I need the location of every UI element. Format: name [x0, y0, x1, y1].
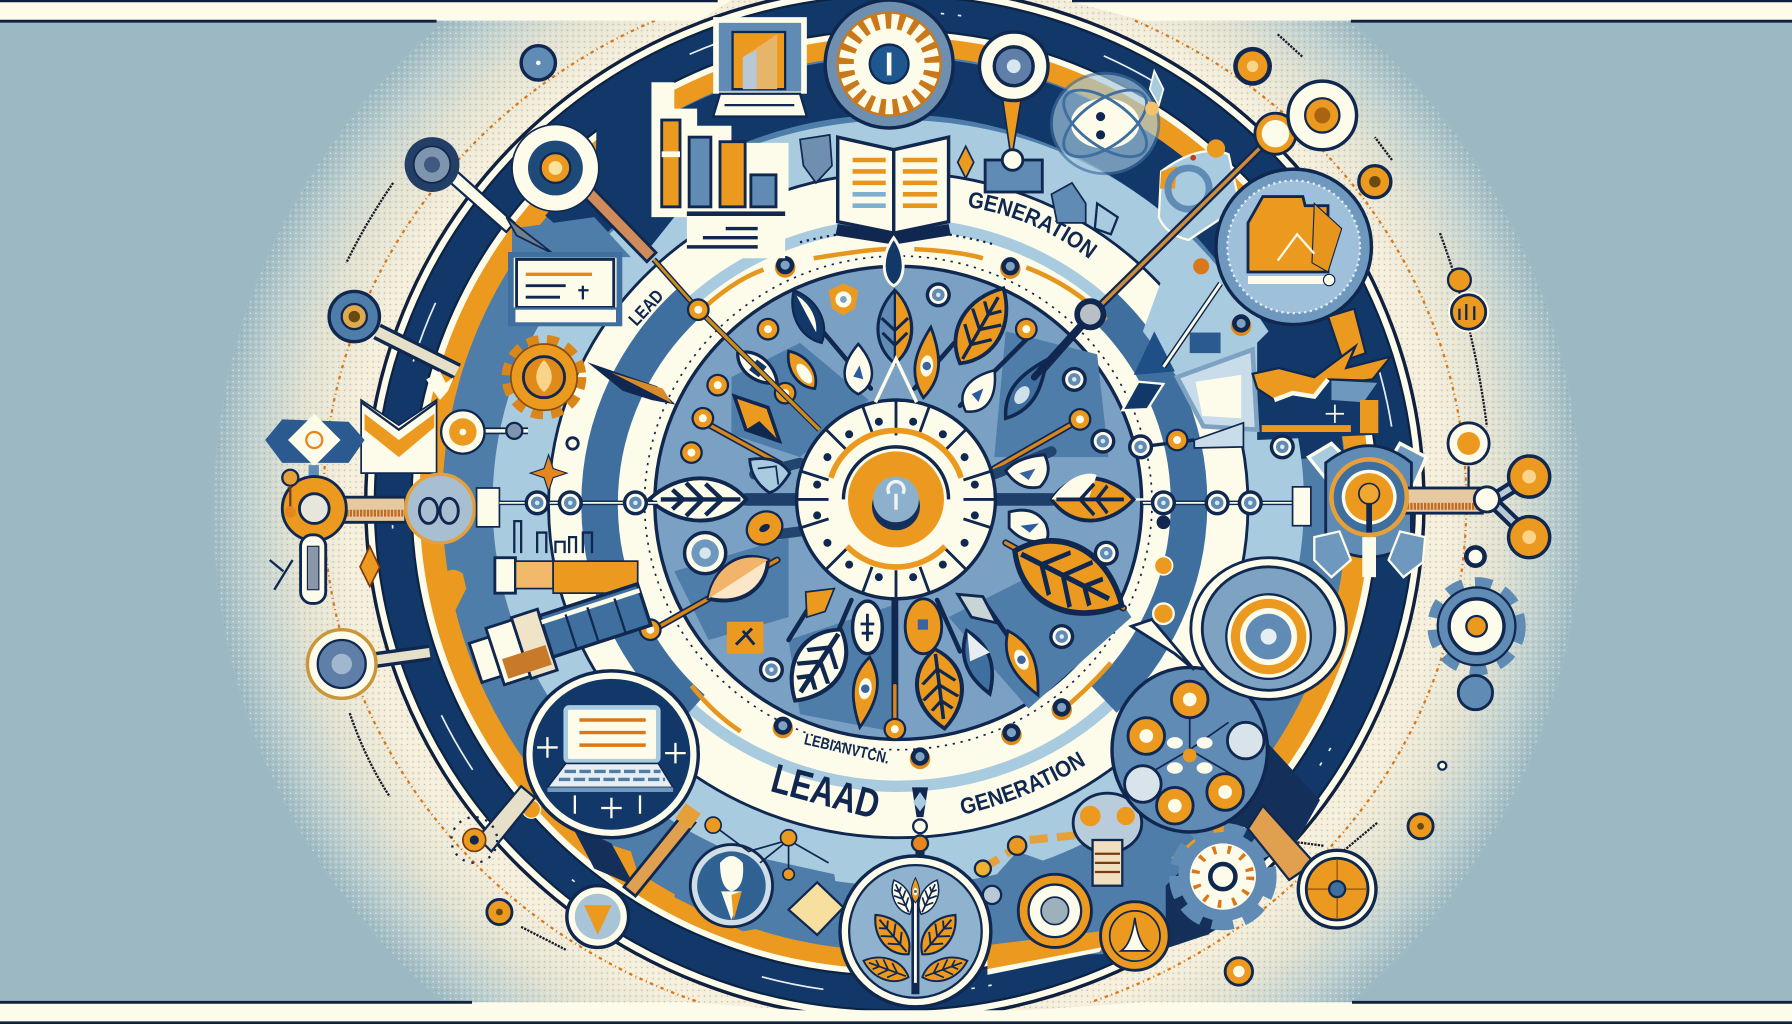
- leaf: white left: [649, 478, 746, 521]
- icon: sparkle top: [1150, 71, 1163, 105]
- node: orange crosshair: [1248, 806, 1376, 928]
- leaf: orange upper right: [942, 278, 1022, 374]
- top cream bar: [0, 0, 1792, 21]
- node: stick knob top right: [1074, 113, 1296, 330]
- icon: shield badge top left: [800, 135, 832, 183]
- icon: monitor left: [511, 255, 619, 323]
- icon: atom: [1051, 73, 1159, 174]
- node: left stick: [329, 291, 457, 371]
- leaf: orange right: [1051, 474, 1134, 521]
- icon: bottom hanging pendant: [912, 787, 928, 859]
- leaves in disc: [639, 256, 1136, 769]
- icon: laptop frame top: [713, 17, 807, 117]
- node: small center right: [1128, 429, 1295, 459]
- node: orange between rings left: [522, 800, 541, 818]
- shard: white blue upper: [955, 362, 1006, 419]
- icon: small eye markers left: [270, 470, 298, 590]
- icon: ring bottom: [1018, 874, 1091, 947]
- node: cone circle: [567, 803, 701, 947]
- chart: small bars: [514, 521, 592, 553]
- node: ring lower right: [1438, 762, 1446, 770]
- icon: location pin left: [443, 570, 466, 611]
- icon: jagged chart right: [1177, 309, 1391, 433]
- icon: person circle: [690, 845, 773, 927]
- patch: steel and navy wedges in lower ring: [571, 731, 1320, 975]
- swirl node: [685, 533, 726, 574]
- icon: pennant right: [1194, 423, 1243, 448]
- node: small orange: [1233, 47, 1272, 86]
- orange chip lower: [806, 589, 834, 617]
- node: small orange right: [1359, 166, 1391, 198]
- node: small orange bottom: [1225, 958, 1253, 985]
- icon: diamond badge: [265, 414, 365, 482]
- orange square icon: [727, 622, 763, 654]
- leaf: navy orange top: [878, 290, 912, 363]
- top arrow tip: [875, 359, 917, 402]
- text: LEAAD bottom: LEAAD: [771, 764, 878, 816]
- icon: bar chart top: [651, 82, 789, 258]
- icon: open book: [835, 137, 951, 286]
- shard: navy white left: [731, 344, 784, 392]
- node: pin above lens: [1153, 515, 1174, 624]
- node: top left small: [521, 46, 555, 80]
- node: orange pin right: [1448, 423, 1489, 491]
- drop: white top: [845, 344, 872, 394]
- icon: left top node with needle: [405, 137, 553, 254]
- icon: diamond accents near book: [958, 146, 974, 178]
- shard: steel bottom right: [955, 626, 1003, 698]
- orange ring leaf: [741, 505, 788, 551]
- icon: orange diamond left: [358, 546, 381, 587]
- drop: orange lower right: [997, 626, 1049, 700]
- gem node top: [829, 283, 858, 315]
- drop: orange bottom: [848, 656, 881, 729]
- patch: steel under navy wedge: [512, 217, 631, 257]
- node: small orange far right: [1448, 269, 1489, 333]
- connector: right axis: [1143, 443, 1550, 577]
- spokes: [651, 309, 1143, 731]
- icon: lens folder top right: [1216, 169, 1371, 325]
- quill feather: [699, 545, 778, 614]
- node: small orange bottom right: [1408, 814, 1433, 839]
- icon: lightbulb: [1073, 793, 1142, 886]
- dotted orbit lines: [323, 21, 1487, 1002]
- icon: small bug star: [1145, 102, 1159, 115]
- icon: gear right: [1435, 547, 1518, 710]
- icon: network nodes bottom: [705, 817, 829, 880]
- icon: arrow shard left: [587, 362, 675, 405]
- leaf: orange bottom: [913, 646, 967, 731]
- text: small caption bottom: LEBIANVTCN.: [804, 734, 888, 764]
- icon: ring stem top right: [979, 32, 1118, 234]
- icon: pen pill: [301, 535, 326, 603]
- icon: spark node bottom left: [451, 786, 535, 863]
- text: LEAD top left: [628, 290, 662, 326]
- central medallion: [797, 400, 995, 599]
- panel: light blue patch under lens with icons: [1143, 258, 1269, 377]
- icon: star sparks: [426, 371, 567, 491]
- text: LEAD top left: LEAD: [628, 290, 662, 326]
- icon: envelope: [361, 400, 437, 473]
- shard: small white right upper: [1006, 455, 1048, 488]
- inner disc: [655, 266, 1142, 739]
- icon: large lens: [1191, 558, 1346, 699]
- icon: hub network circle: [1112, 667, 1267, 832]
- node: white ring orange top right: [1288, 81, 1357, 150]
- shard: small white left: [750, 459, 790, 493]
- outer rings: [366, 0, 1424, 1019]
- leaf: small white bottom: [853, 601, 882, 654]
- icon: laptop circle: [525, 671, 698, 838]
- shard: orange left: [723, 385, 790, 452]
- drop: blue upper right: [996, 354, 1056, 425]
- icon: bell ring bottom: [1101, 902, 1169, 970]
- small nodes in disc: [639, 256, 1119, 769]
- icon: orange tube: [495, 558, 638, 593]
- leaf: navy upper left: [783, 285, 833, 349]
- text: GENERATION bottom: GENERATION: [960, 751, 1086, 814]
- diamond: orange small: [958, 594, 997, 623]
- node: left lower: [307, 630, 430, 698]
- icon: big gear lower right: [1177, 831, 1269, 922]
- text: LEAAD bottom: [771, 764, 878, 816]
- icon: orange gear: [507, 341, 581, 414]
- shadows in disc: [674, 331, 1131, 731]
- icon: chain bottom right: [975, 834, 1086, 904]
- icon: needle mid right: [1122, 283, 1221, 410]
- leaf: white lower left: [775, 617, 861, 714]
- stick: lower right of top right: [1034, 139, 1269, 377]
- node: small orange lower left: [487, 899, 512, 925]
- shard: small white right lower: [1009, 510, 1048, 542]
- text: GENERATION top: GENERATION: [969, 192, 1098, 258]
- icon: diamond bottom: [789, 882, 843, 935]
- icon: cone shard lower right: [1131, 619, 1194, 670]
- bottom cream bar: [0, 1002, 1792, 1024]
- node: ring on cream: [567, 438, 578, 449]
- drop: small orange bottom: [905, 599, 942, 654]
- shard: orange white: [780, 345, 823, 394]
- cream band: [549, 173, 1248, 838]
- patch: navy right wedge: [1257, 309, 1389, 440]
- node: orange small with link: [441, 410, 528, 454]
- icon: shield right top: [1159, 139, 1240, 240]
- speckled halo: [214, 0, 1580, 1010]
- icon: wheat medallion bottom: [840, 856, 991, 1007]
- drop: orange upper: [912, 326, 942, 399]
- patch: navy top left wedge: [594, 86, 674, 246]
- icon: syringe: [466, 577, 655, 693]
- icon: gear medallion top: [825, 0, 953, 128]
- icon: left top ring with brush: [512, 125, 819, 430]
- leaf: big orange lower right: [1000, 522, 1136, 634]
- icon: navy triangle right: [1134, 331, 1175, 375]
- connector: left axis: [282, 474, 657, 543]
